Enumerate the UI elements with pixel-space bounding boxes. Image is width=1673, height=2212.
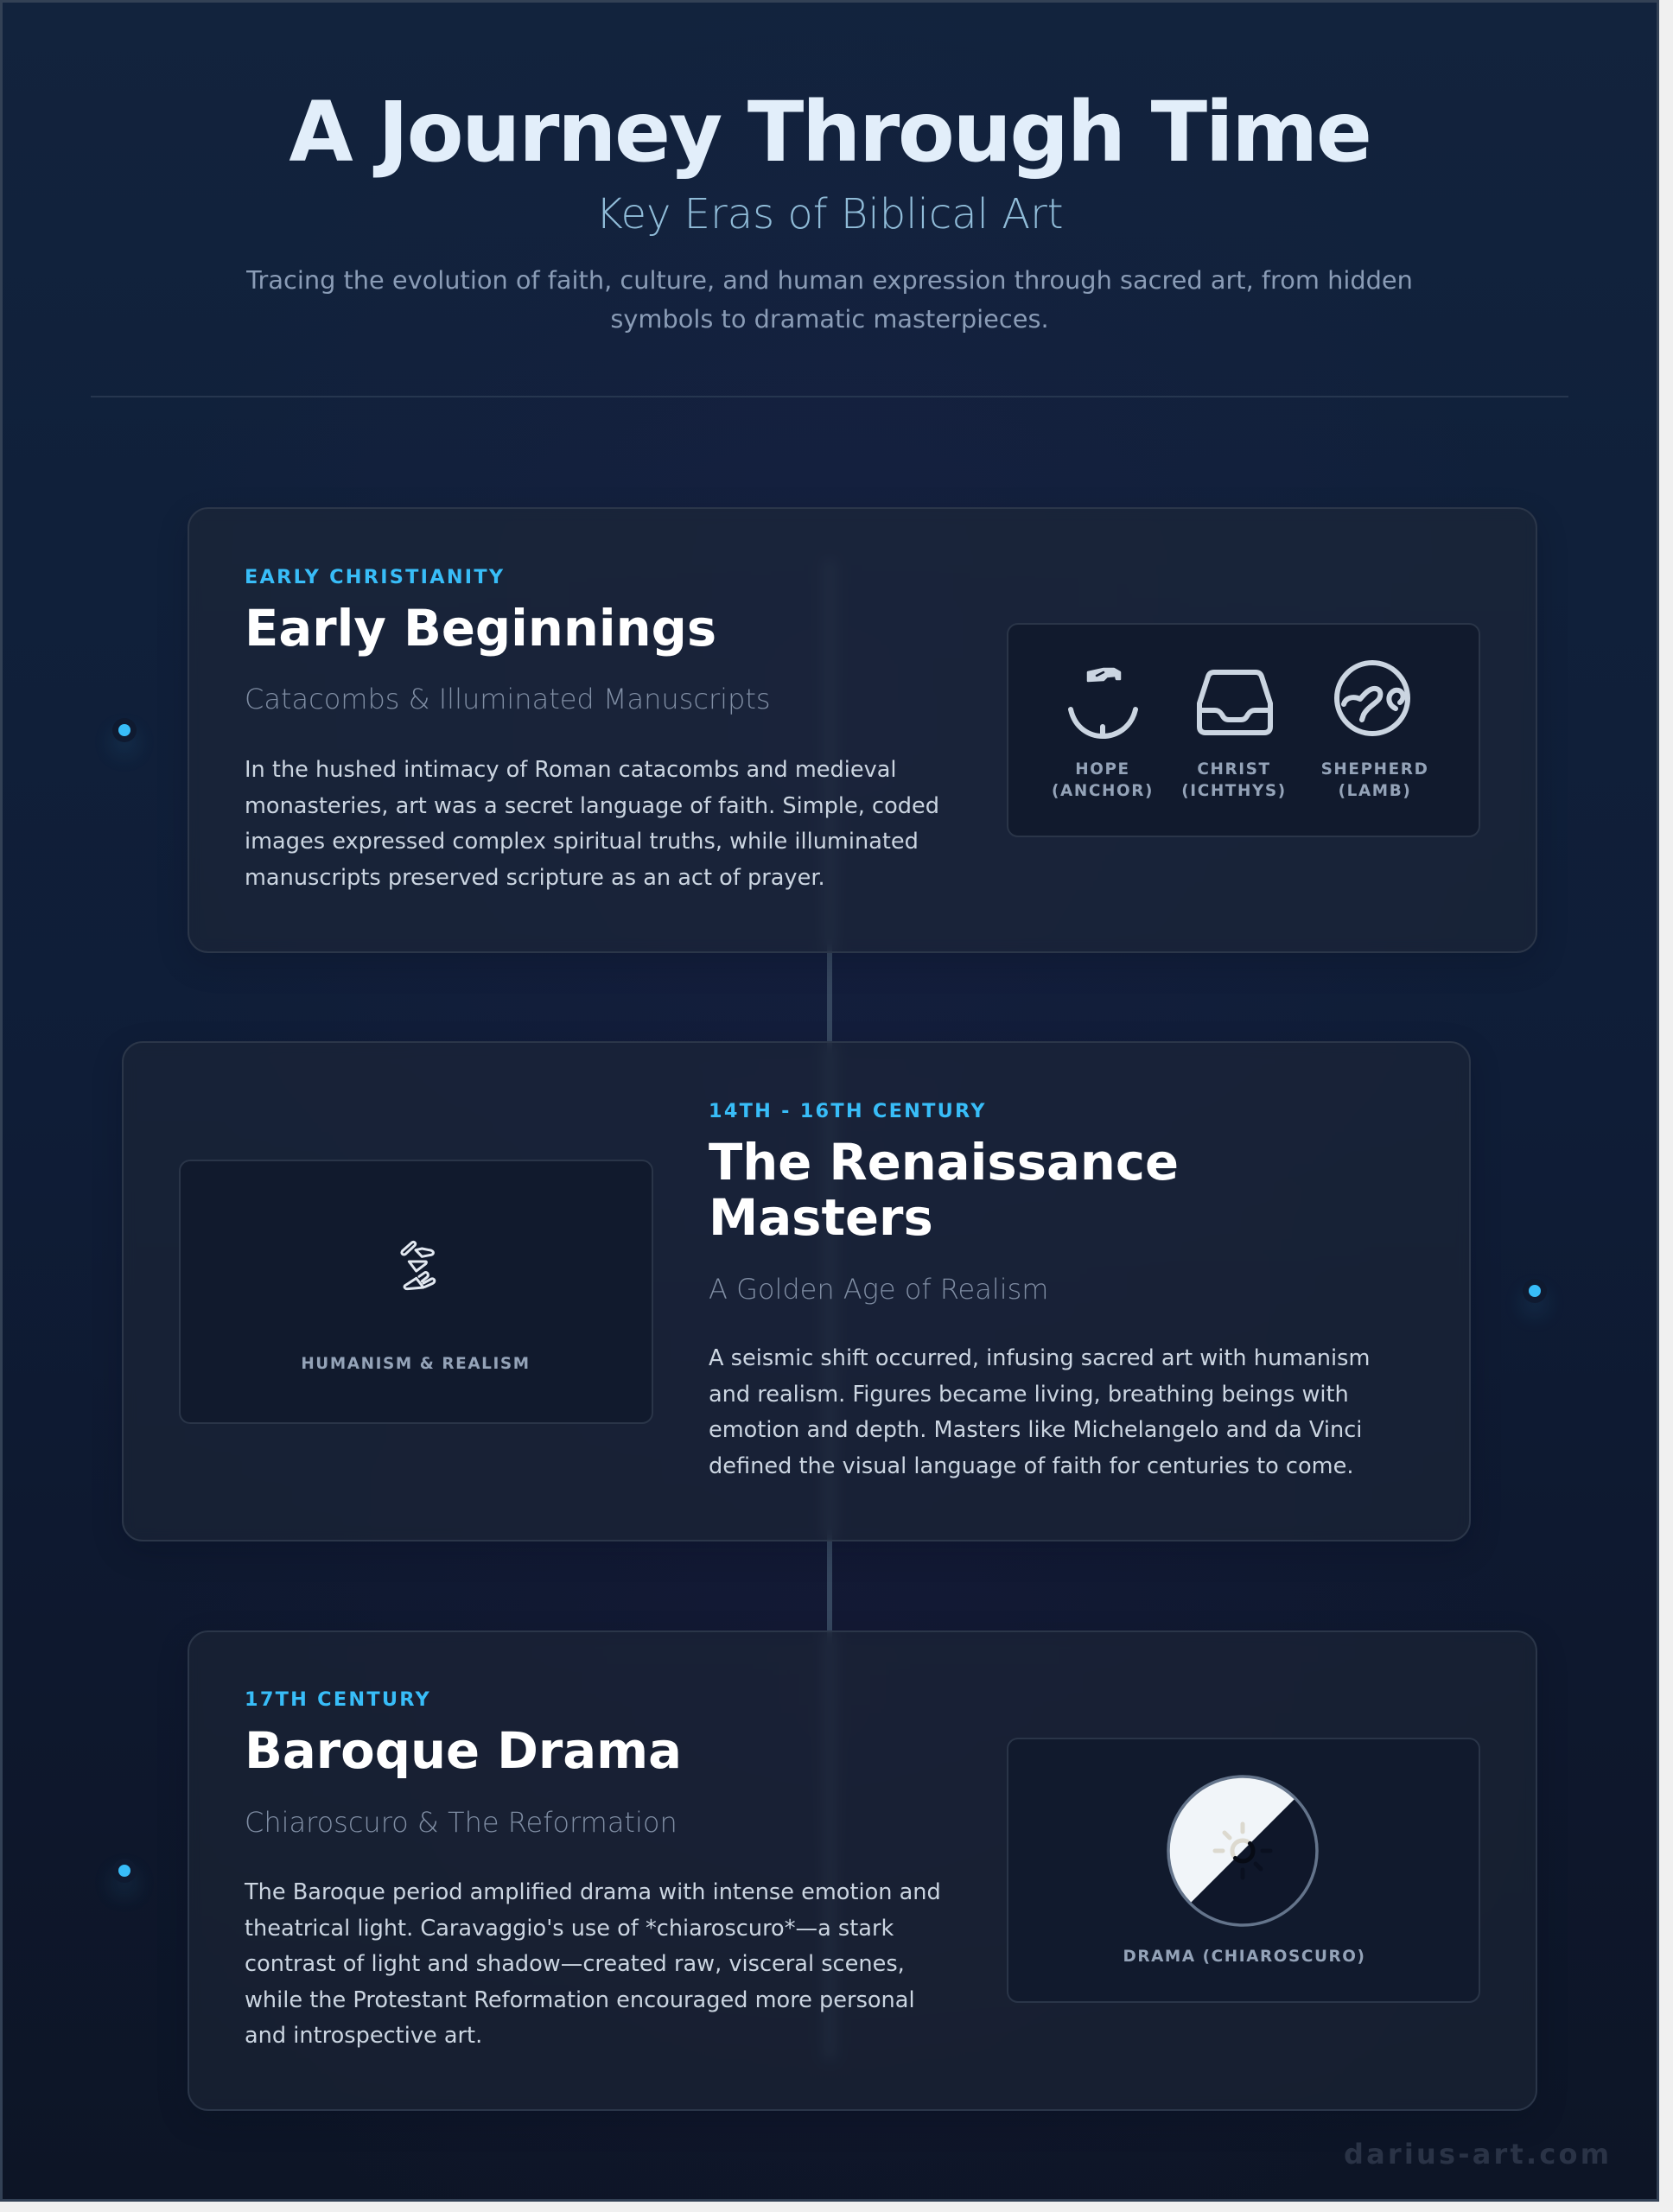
icon: lamb	[1334, 660, 1410, 736]
description: In the hushed intimacy of Roman catacombs and medieval	[245, 757, 897, 783]
symbols box	[1007, 623, 1480, 837]
label: christ	[1181, 760, 1287, 800]
description: A seismic shift occurred, infusing sacred art with humanism	[709, 1345, 1370, 1371]
header divider	[91, 396, 1568, 397]
era label: EARLY CHRISTIANITY	[245, 566, 505, 588]
description: while the Protestant Reformation encouraged more personal	[245, 1987, 915, 2013]
description: emotion and depth. Masters like Michelangelo and da Vinci	[709, 1417, 1362, 1443]
label: shepherd: (LAMB)	[1339, 782, 1411, 800]
timeline line	[827, 560, 832, 2059]
text column	[709, 1100, 1370, 1479]
description: and realism. Figures became living, breathing beings with	[709, 1382, 1349, 1408]
watermark: darius-art.com	[1344, 2138, 1612, 2171]
label: drama: DRAMA (CHIAROSCURO)	[1123, 1948, 1366, 1966]
intro text	[246, 265, 1413, 334]
intro text: Tracing the evolution of faith, culture, and human expression through sacred art, from hidden	[246, 265, 1413, 295]
description: manuscripts preserved scripture as an act of prayer.	[245, 865, 825, 891]
timeline dot: early	[118, 724, 130, 736]
label: christ: CHRIST	[1197, 760, 1271, 779]
panel: baroque	[188, 1630, 1537, 2111]
icon: chiaroscuro circle	[1167, 1775, 1319, 1927]
era label: 17TH CENTURY	[245, 1688, 431, 1711]
label: hope: HOPE	[1075, 760, 1130, 779]
heading: The Renaissance	[709, 1134, 1179, 1192]
description: theatrical light. Caravaggio's use of *chiaroscuro*—a stark	[245, 1916, 894, 1942]
icon: hands	[400, 1241, 436, 1291]
era label: 14TH - 16TH CENTURY	[709, 1100, 987, 1122]
description: defined the visual language of faith for centuries to come.	[709, 1453, 1353, 1479]
intro text: symbols to dramatic masterpieces.	[610, 304, 1049, 334]
visual box	[179, 1160, 653, 1424]
timeline dot: baroque	[118, 1865, 130, 1877]
label: hope: (ANCHOR)	[1052, 782, 1154, 800]
timeline dot: renaissance	[1529, 1285, 1541, 1297]
description: and introspective art.	[245, 2023, 482, 2049]
description	[244, 1879, 941, 2049]
description	[245, 757, 939, 891]
description: contrast of light and shadow—created raw, visceral scenes,	[245, 1951, 905, 1977]
heading: Early Beginnings	[245, 600, 716, 658]
subtitle: Key Eras of Biblical Art	[595, 190, 1064, 238]
description: images expressed complex spiritual truths, while illuminated	[245, 829, 919, 855]
panel: early beginnings	[188, 507, 1537, 953]
label: humanism: HUMANISM & REALISM	[301, 1355, 531, 1373]
heading	[709, 1134, 1179, 1247]
icon: anchor	[1068, 667, 1138, 739]
label: shepherd: SHEPHERD	[1321, 760, 1428, 779]
visual box	[1007, 1738, 1480, 2003]
label: shepherd	[1321, 760, 1428, 800]
title: A Journey Through Time	[289, 84, 1371, 181]
description: The Baroque period amplified drama with intense emotion and	[245, 1879, 941, 1905]
subheading: A Golden Age of Realism	[709, 1273, 1048, 1306]
heading: Baroque Drama	[245, 1722, 682, 1780]
subheading: Catacombs & Illuminated Manuscripts	[245, 683, 771, 715]
label: hope	[1052, 760, 1154, 800]
icon: inbox	[1197, 670, 1273, 735]
description	[709, 1345, 1370, 1479]
description: monasteries, art was a secret language of faith. Simple, coded	[245, 793, 939, 819]
heading: Masters	[709, 1189, 933, 1247]
subheading: Chiaroscuro & The Reformation	[245, 1806, 677, 1839]
label: christ: (ICHTHYS)	[1181, 782, 1287, 800]
panel: renaissance	[122, 1041, 1471, 1541]
